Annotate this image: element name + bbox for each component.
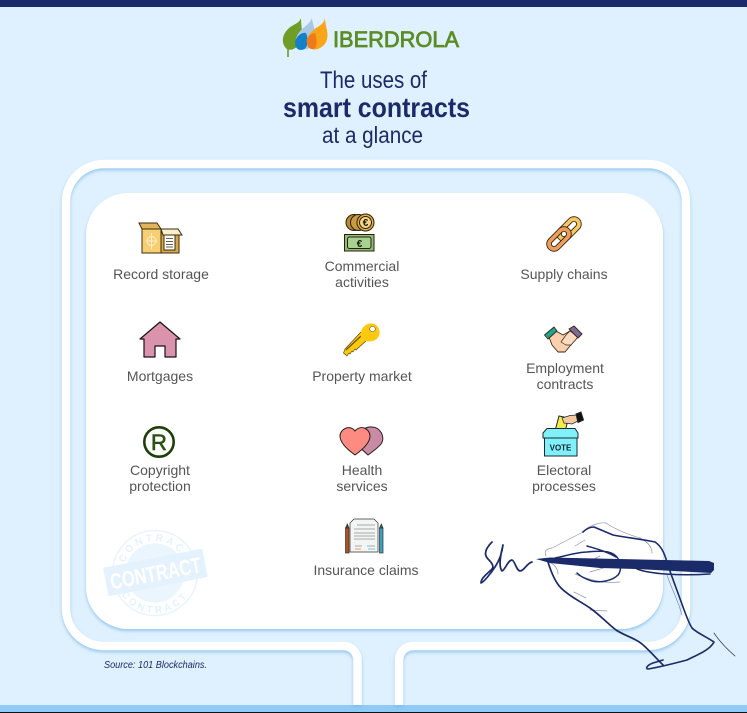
item: supply chains: [520, 217, 608, 282]
icon: two hearts: [340, 427, 383, 455]
label: Copyright: [130, 462, 190, 478]
item: insurance claims: [313, 519, 419, 578]
item: property market: [312, 323, 412, 384]
item: health services: [336, 427, 388, 494]
label: Mortgages: [127, 368, 193, 384]
item: mortgages: [127, 322, 193, 384]
icon: registered mark: R: [151, 430, 167, 455]
item: record storage: [113, 223, 209, 282]
euro glyphs: €: [363, 218, 369, 229]
label line 2: processes: [532, 478, 596, 494]
icon: ballot box: [543, 412, 584, 456]
bottom band: [0, 705, 747, 713]
label line 2: contracts: [537, 376, 593, 392]
title: at a glance: [322, 122, 423, 148]
label: Property market: [312, 368, 412, 384]
stamp: CONTRACT watermark: CONTRACT: [108, 552, 204, 594]
hand outline thin: [545, 523, 682, 615]
top bar: [0, 0, 747, 7]
item: electoral processes: [532, 412, 596, 494]
label: Supply chains: [520, 266, 608, 282]
wrist and lower hand: [548, 562, 663, 665]
icon: document and pens: [346, 519, 383, 553]
label line 2: services: [336, 478, 388, 494]
icon: coins and banknote: [344, 214, 374, 251]
stamp: CONTRACT watermark: [104, 530, 208, 616]
hand outline bold: [583, 527, 714, 669]
source note: Source: 101 Blockchains.: [104, 660, 207, 671]
icon: leaf and drops: [283, 18, 328, 57]
stamp: CONTRACT watermark: CONTRACT: [120, 534, 184, 562]
label: Record storage: [113, 266, 209, 282]
label: Employment: [526, 360, 604, 376]
icon: handshake: [544, 326, 582, 352]
label line 2: protection: [129, 478, 191, 494]
title: [283, 67, 470, 148]
icon: storage boxes: [139, 223, 182, 253]
flick stroke: [714, 633, 735, 656]
label line 2: activities: [335, 274, 389, 290]
euro glyphs: €: [357, 239, 363, 250]
item: copyright protection: [129, 427, 191, 494]
signature: [481, 542, 532, 583]
fingers: [555, 546, 620, 582]
ballot box word: VOTE: [550, 444, 572, 452]
label: Commercial: [325, 258, 399, 274]
panel: white content card: [86, 193, 663, 629]
logo wordmark: IBERDROLA: [333, 27, 459, 52]
euro glyphs: [357, 218, 369, 250]
frame: outer white outline: [66, 164, 686, 705]
item: commercial activities: [325, 214, 399, 290]
pen: [536, 558, 714, 573]
label: Health: [342, 462, 382, 478]
title: The uses of: [320, 67, 427, 94]
logo: Iberdrola: [283, 18, 459, 57]
label: Insurance claims: [313, 562, 419, 578]
icon: chain links: [547, 217, 581, 251]
label: Electoral: [537, 462, 591, 478]
title: smart contracts: [283, 92, 470, 123]
item: employment contracts: [526, 326, 604, 392]
icon: house: [140, 322, 180, 357]
illustration: hand holding pen: [536, 523, 735, 669]
icon: key: [344, 323, 380, 356]
pen underline: [637, 569, 710, 575]
stamp: CONTRACT watermark: CONTRACT: [122, 592, 186, 614]
